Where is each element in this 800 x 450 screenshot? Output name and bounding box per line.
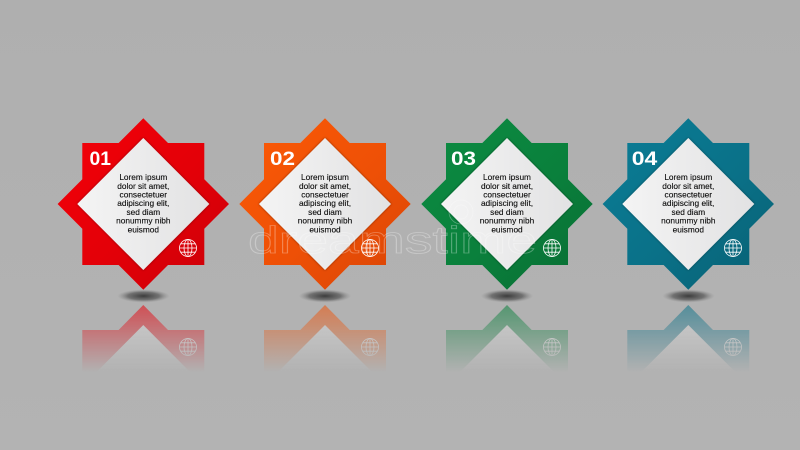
text block: consectetuer (483, 190, 531, 200)
inner diamond (259, 138, 391, 270)
text block: sed diam (308, 207, 342, 217)
text block: Lorem ipsum (301, 172, 349, 182)
watermark: dreamstime (248, 220, 537, 262)
panel: card 01 (58, 118, 229, 290)
star shape (603, 118, 774, 290)
text block: consectetuer (120, 190, 167, 200)
watermark (248, 200, 537, 262)
number: 02 (270, 148, 295, 170)
text block: euismod (673, 224, 704, 234)
text block (298, 172, 353, 234)
shadow: orange card (299, 290, 351, 302)
text block: sed diam (490, 207, 524, 217)
shadow: blue card (662, 290, 714, 302)
text block: dolor sit amet, (481, 181, 533, 191)
star shape (421, 118, 593, 290)
number: 03 (451, 148, 476, 170)
text block: adipiscing elit, (117, 198, 169, 208)
text block: dolor sit amet, (662, 181, 714, 191)
text block: Lorem ipsum (664, 172, 712, 182)
inner diamond (622, 138, 754, 270)
text block: dolor sit amet, (299, 181, 351, 191)
inner diamond (441, 138, 573, 270)
text block: nonummy nibh (298, 216, 353, 226)
text block: sed diam (671, 207, 705, 217)
number: 01 (90, 148, 111, 170)
reflection: green card (446, 305, 568, 366)
icon: globe (724, 240, 742, 256)
text block: euismod (309, 224, 341, 234)
panel: card 02 (239, 118, 411, 290)
icon: globe (544, 240, 560, 256)
shadow: green card (481, 290, 533, 302)
icon: globe (362, 240, 378, 256)
text block: nonummy nibh (480, 216, 535, 226)
text block: Lorem ipsum (119, 172, 167, 182)
star shape (58, 118, 229, 290)
text block: euismod (128, 224, 159, 234)
text block: Lorem ipsum (483, 172, 531, 182)
text block: adipiscing elit, (299, 198, 351, 208)
text block: consectetuer (665, 190, 712, 200)
text block: euismod (491, 224, 523, 234)
text block: nonummy nibh (116, 216, 171, 226)
text block: adipiscing elit, (481, 198, 533, 208)
text block: sed diam (126, 207, 160, 217)
reflection: orange card (264, 305, 386, 366)
icon: globe (180, 240, 196, 256)
text block: consectetuer (301, 190, 349, 200)
panel: card 04 (603, 118, 774, 290)
inner diamond (77, 138, 209, 270)
text block: nonummy nibh (661, 216, 716, 226)
reflection: blue card (627, 305, 750, 366)
number: 04 (632, 148, 657, 170)
shadow: red card (118, 290, 170, 302)
text block: dolor sit amet, (117, 181, 169, 191)
text block: adipiscing elit, (662, 198, 714, 208)
reflection: red card (82, 305, 204, 366)
text block (661, 172, 716, 234)
panel: card 03 (421, 118, 593, 290)
star shape (239, 118, 411, 290)
text block (480, 172, 535, 234)
text block (116, 172, 171, 234)
